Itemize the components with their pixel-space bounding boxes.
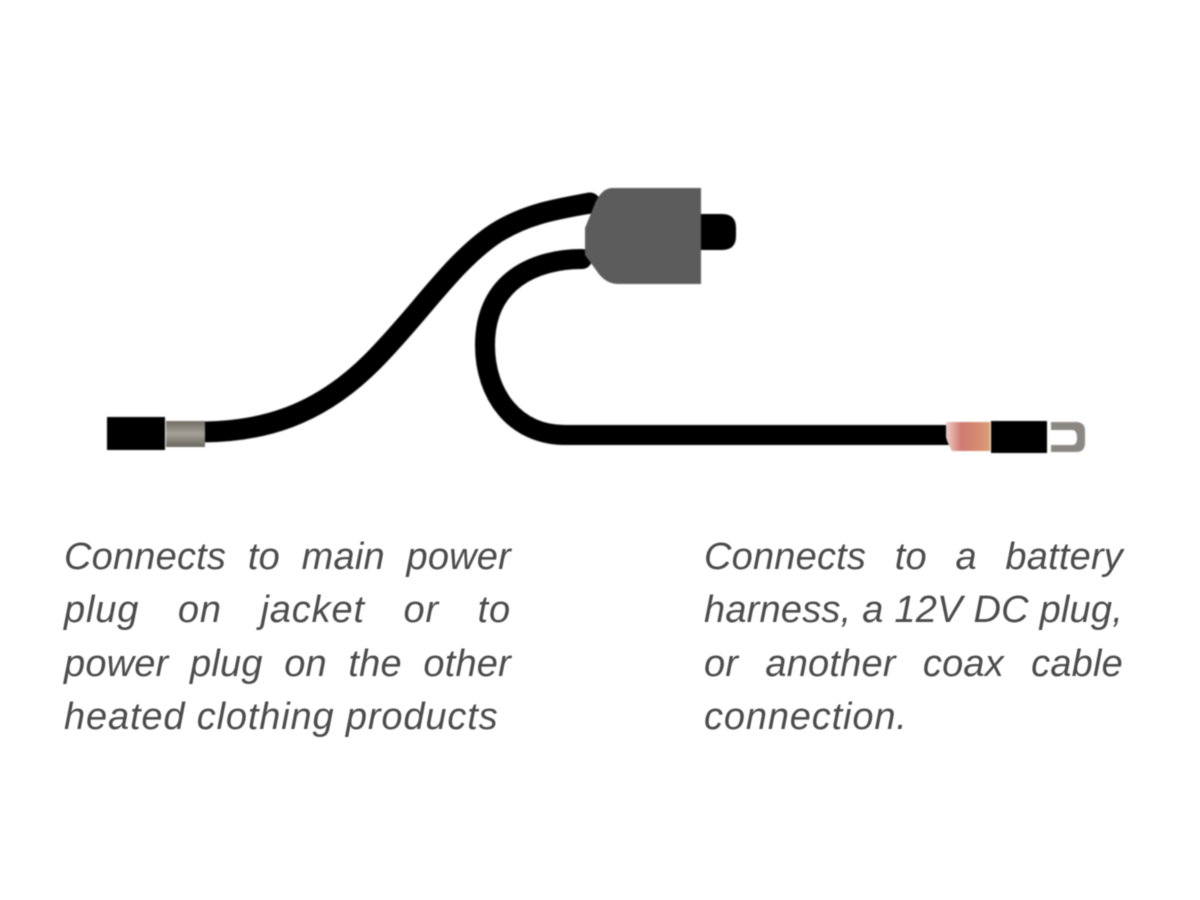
- right caption: or another coax cable: [704, 643, 1123, 685]
- right black plug: [991, 421, 1047, 453]
- lower cable to right connector: [485, 259, 950, 435]
- right caption: harness, a 12V DC plug,: [704, 589, 1123, 631]
- right caption: Connects to a battery: [704, 536, 1123, 578]
- left black plug: [107, 417, 165, 450]
- left caption: Connects to main power: [64, 536, 511, 578]
- right caption: [704, 536, 1125, 738]
- left caption: power plug on the other: [64, 643, 511, 685]
- right copper sleeve: [946, 422, 990, 451]
- upper cable to left connector: [200, 203, 590, 432]
- left metal sleeve: [166, 421, 205, 447]
- junction housing: [585, 188, 701, 284]
- right caption: connection.: [704, 696, 908, 738]
- left caption: [62, 536, 513, 738]
- left caption: plug on jacket or to: [64, 589, 511, 631]
- left caption: heated clothing products: [64, 696, 498, 738]
- right metal ring terminal: [1051, 422, 1085, 452]
- junction push button: [700, 214, 736, 250]
